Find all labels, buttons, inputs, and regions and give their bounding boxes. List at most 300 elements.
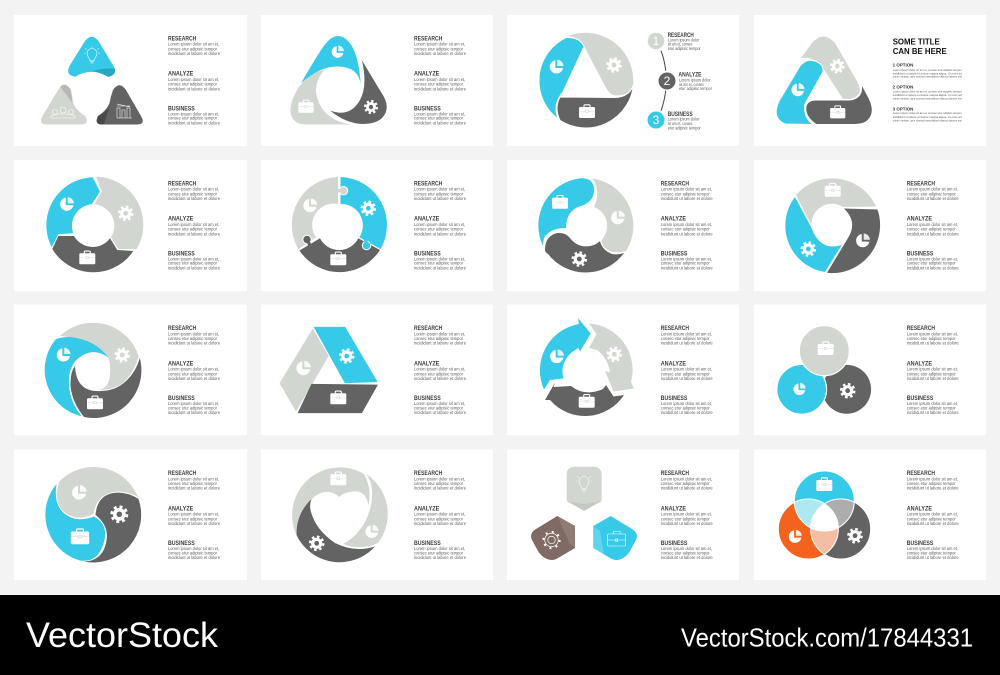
icon: briefcase <box>579 394 595 408</box>
text block: research analyze business: consec etur adipisic tempor <box>168 336 217 341</box>
text block: research analyze business: consec etur adipisic tempor <box>907 261 956 266</box>
panel: pentagon cards <box>507 450 739 580</box>
options text: Lorem ipsum dolor sit am et, consec etur adipisic tempor <box>893 111 962 115</box>
panel: three overlapping circles <box>754 304 986 435</box>
text block: research analyze business: RESEARCH <box>414 35 443 42</box>
text block: research analyze business: consec etur adipisic tempor <box>414 116 463 121</box>
text block: research analyze business: consec etur adipisic tempor <box>661 405 710 410</box>
icon: briefcase <box>830 106 845 118</box>
brand name: VectorStock <box>26 616 219 655</box>
right dark triangle with bar chart <box>97 85 143 124</box>
text block: research analyze business: RESEARCH <box>168 180 197 187</box>
gray segment <box>60 323 138 390</box>
icon: briefcase <box>552 196 568 209</box>
text: business: Lorem ipsum dolor <box>668 117 700 122</box>
text block: research analyze business: consec etur adipisic tempor <box>414 516 463 521</box>
dark segment <box>330 60 387 124</box>
text block: research analyze business: Lorem ipsum dolor sit am et, <box>414 256 465 261</box>
text block: research analyze business: Lorem ipsum dolor sit am et, <box>168 331 219 336</box>
cyan segment <box>539 37 584 119</box>
text: research: etur adipisic tempor <box>668 46 701 51</box>
text block: research analyze business: consec etur adipisic tempor <box>414 371 463 376</box>
text block: research analyze business: consec etur adipisic tempor <box>661 371 710 376</box>
text block: research analyze business: incididunt ut labore et dolore <box>661 341 713 346</box>
icon: gear <box>848 529 862 542</box>
text block: research analyze business: Lorem ipsum dolor sit am et, <box>661 367 712 372</box>
cyan segment <box>340 177 387 249</box>
text block: research analyze business: incididunt ut labore et dolore <box>414 51 466 56</box>
icon: gear <box>310 537 323 550</box>
dark band <box>298 384 377 413</box>
text block: research analyze business: Lorem ipsum dolor sit am et, <box>661 512 712 517</box>
text block: research analyze business: incididunt ut labore et dolore <box>661 410 713 415</box>
text block: research analyze business: consec etur adipisic tempor <box>168 116 217 121</box>
text block: research analyze business: incididunt ut labore et dolore <box>168 410 220 415</box>
icon: pie <box>793 383 806 395</box>
text block: research analyze business: RESEARCH <box>907 325 935 332</box>
text block: research analyze business: ANALYZE <box>661 216 686 223</box>
text block: research analyze business: consec etur adipisic tempor <box>414 46 463 51</box>
text block: research analyze business: consec etur adipisic tempor <box>907 227 956 232</box>
text block: research analyze business: incididunt ut labore et dolore <box>168 521 220 526</box>
dark arrow <box>545 382 624 416</box>
text block: research analyze business: Lorem ipsum dolor sit am et, <box>414 512 465 517</box>
text block: research analyze business: consec etur adipisic tempor <box>168 227 217 232</box>
text block: research analyze business: incididunt ut labore et dolore <box>661 486 713 491</box>
dark segment <box>70 358 141 418</box>
icon: pie <box>296 361 311 375</box>
text block: research analyze business: consec etur adipisic tempor <box>907 481 956 486</box>
text block: research analyze business: consec etur adipisic tempor <box>661 516 710 521</box>
gray segment <box>290 70 350 125</box>
text block: research analyze business: BUSINESS <box>168 105 195 112</box>
text block: research analyze business: Lorem ipsum dolor sit am et, <box>414 111 465 116</box>
text block: research analyze business: consec etur adipisic tempor <box>414 550 463 555</box>
text block: research analyze business: Lorem ipsum dolor sit am et, <box>168 256 219 261</box>
text: research: sit am et, consec <box>668 42 693 47</box>
icon: gear <box>116 348 129 362</box>
text block: research analyze business: incididunt ut labore et dolore <box>414 341 466 346</box>
text block: research analyze business: Lorem ipsum dolor sit am et, <box>414 331 465 336</box>
text block: research analyze business: BUSINESS <box>661 395 687 402</box>
panel: triangle cards <box>14 15 247 146</box>
text block: research analyze business: Lorem ipsum dolor sit am et, <box>661 187 712 192</box>
text block: research analyze business: BUSINESS <box>907 540 933 547</box>
panel: arrow donut <box>14 160 247 291</box>
text block: research analyze business: consec etur adipisic tempor <box>907 371 956 376</box>
venn circles <box>778 471 871 559</box>
icon: briefcase <box>579 105 595 118</box>
icon: pie <box>856 233 870 247</box>
text block: research analyze business <box>661 180 713 270</box>
text block: research analyze business: consec etur adipisic tempor <box>661 227 710 232</box>
gray segment <box>796 178 876 225</box>
icon: gear <box>607 58 621 72</box>
text block: research analyze business: RESEARCH <box>414 470 443 477</box>
left gray triangle with people <box>41 85 87 124</box>
gray segment <box>57 467 138 518</box>
text block: research analyze business: Lorem ipsum dolor sit am et, <box>414 42 465 47</box>
text: analyze: etur adipisic tempor <box>679 86 712 91</box>
text block: research analyze business: consec etur adipisic tempor <box>168 516 217 521</box>
text block: research analyze business: incididunt ut labore et dolore <box>907 410 959 415</box>
gray circle <box>799 326 849 376</box>
text block: research analyze business <box>907 180 959 270</box>
text block: research analyze business: ANALYZE <box>907 505 932 512</box>
text block: research analyze business: RESEARCH <box>661 470 689 477</box>
icon: briefcase <box>816 478 832 491</box>
text block: research analyze business: consec etur adipisic tempor <box>414 191 463 196</box>
icon: gear <box>112 507 127 522</box>
text block: research analyze business: consec etur adipisic tempor <box>661 261 710 266</box>
text block: research analyze business: incididunt ut labore et dolore <box>414 521 466 526</box>
options text: incididunt ut labore et dolore magna aliqua. Ut enim ad <box>893 93 962 97</box>
text block: research analyze business: ANALYZE <box>414 71 439 78</box>
dark segment <box>557 85 634 128</box>
text block: research analyze business: Lorem ipsum dolor sit am et, <box>168 111 219 116</box>
text block: research analyze business: consec etur adipisic tempor <box>168 191 217 196</box>
icon: pie <box>303 198 317 212</box>
panel: circle with triangle hole and numbered steps <box>507 15 739 146</box>
icon: briefcase <box>330 391 346 404</box>
text block: research analyze business: Lorem ipsum dolor sit am et, <box>168 476 219 481</box>
step 2 <box>658 72 676 90</box>
text block: research analyze business: Lorem ipsum dolor sit am et, <box>414 187 465 192</box>
panel: spiral circle <box>14 304 247 435</box>
text block: research analyze business: consec etur adipisic tempor <box>661 481 710 486</box>
text block: research analyze business: incididunt ut labore et dolore <box>907 521 959 526</box>
text block: research analyze business: BUSINESS <box>168 395 195 402</box>
text block: research analyze business: ANALYZE <box>907 360 932 367</box>
gray arrow <box>589 324 634 392</box>
text: business: etur adipisic tempor <box>668 125 701 130</box>
text: research: Lorem ipsum dolor <box>668 37 700 42</box>
gray band <box>280 329 328 411</box>
text: business: BUSINESS <box>668 111 693 118</box>
text block: research analyze business: Lorem ipsum dolor sit am et, <box>168 222 219 227</box>
icon: pie <box>365 525 379 538</box>
text block: research analyze business: RESEARCH <box>661 180 689 187</box>
gray pentagon with bulb <box>567 467 602 511</box>
text block: research analyze business: RESEARCH <box>168 470 197 477</box>
cyan segment <box>785 197 842 272</box>
panel: folded triangle <box>261 304 493 435</box>
text block: research analyze business: Lorem ipsum dolor sit am et, <box>661 331 712 336</box>
panel: yin yang circle <box>14 450 247 580</box>
text block: research analyze business: consec etur adipisic tempor <box>168 405 217 410</box>
text block: research analyze business: ANALYZE <box>168 360 193 367</box>
options text <box>893 63 962 122</box>
upper gray segment <box>292 467 370 534</box>
cyan circle <box>777 364 827 414</box>
panel: rounded triangle with title <box>754 15 986 146</box>
gray segment <box>94 177 143 249</box>
text block: research analyze business <box>168 470 220 560</box>
text block: research analyze business: consec etur adipisic tempor <box>168 261 217 266</box>
dark segment <box>300 238 380 272</box>
puzzle knobs <box>302 186 371 250</box>
text block: research analyze business <box>661 470 713 560</box>
text block: research analyze business: incididunt ut labore et dolore <box>907 486 959 491</box>
text block: research analyze business: RESEARCH <box>907 470 935 477</box>
gray segment <box>592 178 633 252</box>
icon: pie <box>60 197 74 211</box>
footer bar <box>0 595 1000 675</box>
text block: research analyze business: consec etur adipisic tempor <box>907 336 956 341</box>
text block: research analyze business: RESEARCH <box>414 180 443 187</box>
cyan arrow <box>540 318 591 390</box>
text block: research analyze business: Lorem ipsum dolor sit am et, <box>907 512 958 517</box>
text block: research analyze business: consec etur adipisic tempor <box>907 405 956 410</box>
text block: research analyze business: Lorem ipsum dolor sit am et, <box>907 476 958 481</box>
text block: research analyze business: Lorem ipsum dolor sit am et, <box>907 546 958 551</box>
text block: research analyze business: consec etur adipisic tempor <box>661 336 710 341</box>
options text: incididunt ut labore et dolore magna aliqua. Ut enim ad <box>893 115 962 119</box>
text block: research analyze business: consec etur adipisic tempor <box>414 481 463 486</box>
text block: research analyze business: BUSINESS <box>414 105 441 112</box>
cyan segment <box>538 178 594 246</box>
text block: research analyze business: ANALYZE <box>661 360 686 367</box>
text block: research analyze business: BUSINESS <box>907 395 933 402</box>
icon: briefcase <box>330 252 346 265</box>
options text: Lorem ipsum dolor sit am et, consec etur adipisic tempor <box>893 68 962 72</box>
icon: gear <box>573 252 586 266</box>
text block: research analyze business: incididunt ut labore et dolore <box>661 555 713 560</box>
text block: research analyze business: consec etur adipisic tempor <box>168 46 217 51</box>
top cyan triangle with bulb <box>68 37 115 77</box>
icon: gear <box>362 202 375 215</box>
text: business: sit am et, consec <box>668 121 693 126</box>
text block: research analyze business: incididunt ut labore et dolore <box>168 120 220 125</box>
icon: gear <box>831 60 844 72</box>
icon: briefcase <box>330 472 346 485</box>
text block: research analyze business: consec etur adipisic tempor <box>168 371 217 376</box>
title: CAN BE HERE <box>893 47 947 56</box>
text block: research analyze business: consec etur adipisic tempor <box>414 82 463 87</box>
text block: research analyze business: ANALYZE <box>414 360 439 367</box>
text block: research analyze business: consec etur adipisic tempor <box>414 227 463 232</box>
text block: research analyze business <box>168 180 220 270</box>
text block: research analyze business: Lorem ipsum dolor sit am et, <box>907 256 958 261</box>
icon: pie <box>550 60 564 74</box>
text block: research analyze business: RESEARCH <box>414 325 443 332</box>
text block: research analyze business: ANALYZE <box>168 505 193 512</box>
text block: research analyze business: Lorem ipsum dolor sit am et, <box>414 546 465 551</box>
text block: research analyze business: incididunt ut labore et dolore <box>414 231 466 236</box>
text block: research analyze business: incididunt ut labore et dolore <box>907 196 959 201</box>
text block: research analyze business: RESEARCH <box>907 180 935 187</box>
text block: research analyze business: Lorem ipsum dolor sit am et, <box>168 546 219 551</box>
text block: research analyze business: Lorem ipsum dolor sit am et, <box>907 331 958 336</box>
text block: research analyze business <box>168 325 220 415</box>
text block: research analyze business: consec etur adipisic tempor <box>907 550 956 555</box>
icon: gear <box>340 349 353 363</box>
text block: research analyze business: incididunt ut labore et dolore <box>168 486 220 491</box>
text block: research analyze business: BUSINESS <box>168 250 195 257</box>
text block: research analyze business: ANALYZE <box>661 505 686 512</box>
text block: research analyze business: incididunt ut labore et dolore <box>907 265 959 270</box>
text: analyze: Lorem ipsum dolor <box>679 77 711 82</box>
text block: research analyze business: incididunt ut labore et dolore <box>414 196 466 201</box>
icon: pie <box>550 349 564 363</box>
text block: research analyze business <box>414 180 466 270</box>
icon: pie <box>789 530 802 543</box>
text block: research analyze business: Lorem ipsum dolor sit am et, <box>414 222 465 227</box>
title: SOME TITLE <box>893 37 940 46</box>
icon: briefcase <box>825 184 841 197</box>
text block: research analyze business: ANALYZE <box>414 216 439 223</box>
gray segment <box>568 33 633 96</box>
gray segment <box>292 177 338 249</box>
panel: venn diagram <box>754 450 986 580</box>
text: analyze: ANALYZE <box>678 72 702 79</box>
text block: research analyze business: incididunt ut labore et dolore <box>661 376 713 381</box>
cyan segment <box>45 337 108 416</box>
text: business <box>668 111 701 130</box>
options text: 2 OPTION <box>893 85 913 90</box>
text block: research analyze business <box>168 35 220 125</box>
text block: research analyze business: incididunt ut labore et dolore <box>414 376 466 381</box>
panel: circular arrows <box>507 304 739 435</box>
icon: briefcase <box>298 100 314 113</box>
text block: research analyze business: incididunt ut labore et dolore <box>168 265 220 270</box>
text block: research analyze business: Lorem ipsum dolor sit am et, <box>661 256 712 261</box>
text block: research analyze business: incididunt ut labore et dolore <box>907 555 959 560</box>
text block: research analyze business: BUSINESS <box>414 395 441 402</box>
text block: research analyze business: incididunt ut labore et dolore <box>168 555 220 560</box>
icon: gear <box>802 242 815 256</box>
text block: research analyze business: consec etur adipisic tempor <box>907 191 956 196</box>
title <box>893 37 947 56</box>
panel: curved rounded triangle <box>261 15 493 146</box>
text block: research analyze business: consec etur adipisic tempor <box>168 550 217 555</box>
text block: research analyze business: consec etur adipisic tempor <box>661 191 710 196</box>
text block: research analyze business: RESEARCH <box>661 325 689 332</box>
text block: research analyze business: BUSINESS <box>414 540 441 547</box>
dark segment <box>827 208 880 273</box>
icon: briefcase <box>87 396 103 409</box>
text block: research analyze business: consec etur adipisic tempor <box>414 336 463 341</box>
icon: briefcase <box>818 342 834 355</box>
gray band <box>801 36 860 99</box>
text block: research analyze business <box>907 325 959 415</box>
text block: research analyze business: incididunt ut labore et dolore <box>661 196 713 201</box>
text block: research analyze business: BUSINESS <box>661 250 687 257</box>
text block: research analyze business: incididunt ut labore et dolore <box>414 410 466 415</box>
text: analyze: sit am et, consec <box>679 82 704 87</box>
panel: wavy donut <box>507 160 739 291</box>
text block: research analyze business: incididunt ut labore et dolore <box>168 86 220 91</box>
text block: research analyze business <box>414 325 466 415</box>
icon: briefcase <box>79 251 95 264</box>
text block: research analyze business: consec etur adipisic tempor <box>168 481 217 486</box>
text block: research analyze business: BUSINESS <box>907 250 933 257</box>
icon: pie <box>791 83 805 96</box>
panel: heart circle <box>261 450 493 580</box>
text block: research analyze business <box>414 470 466 560</box>
cyan segment <box>45 484 105 561</box>
text block: research analyze business: ANALYZE <box>907 216 932 223</box>
text block: research analyze business: Lorem ipsum dolor sit am et, <box>907 367 958 372</box>
icon: gear <box>365 101 377 113</box>
dark circle <box>822 365 871 414</box>
text block: research analyze business: consec etur adipisic tempor <box>661 550 710 555</box>
dark band <box>806 83 872 124</box>
text block: research analyze business: Lorem ipsum dolor sit am et, <box>907 187 958 192</box>
text block: research analyze business: Lorem ipsum dolor sit am et, <box>661 546 712 551</box>
icon: briefcase <box>71 529 89 544</box>
right gray segment <box>343 474 388 547</box>
text block: research analyze business: incididunt ut labore et dolore <box>661 521 713 526</box>
icon: pie <box>72 485 87 500</box>
text block: research analyze business <box>414 35 466 125</box>
text block: research analyze business: RESEARCH <box>168 35 197 42</box>
text block: research analyze business: Lorem ipsum dolor sit am et, <box>168 401 219 406</box>
text block: research analyze business: incididunt ut labore et dolore <box>414 555 466 560</box>
text block: research analyze business <box>661 325 713 415</box>
text block: research analyze business: consec etur adipisic tempor <box>907 516 956 521</box>
image url: VectorStock.com/17844331 <box>681 622 973 652</box>
icon: gear <box>119 207 132 220</box>
text block: research analyze business: BUSINESS <box>414 250 441 257</box>
options text: minim veniam, quis nostrud exercitation ullamco laboris nisi <box>893 96 962 100</box>
options text: incididunt ut labore et dolore magna aliqua. Ut enim ad <box>893 72 962 76</box>
text block: research analyze business: Lorem ipsum dolor sit am et, <box>168 367 219 372</box>
options text: 1 OPTION <box>893 63 913 68</box>
cyan band <box>776 60 823 124</box>
text block: research analyze business: Lorem ipsum dolor sit am et, <box>907 222 958 227</box>
step 2: 2 <box>664 74 671 88</box>
cyan segment <box>46 177 100 247</box>
cyan segment <box>301 36 361 85</box>
text block: research analyze business: Lorem ipsum dolor sit am et, <box>907 401 958 406</box>
connector arcs <box>661 51 666 111</box>
text block: research analyze business: incididunt ut labore et dolore <box>414 86 466 91</box>
dark segment <box>296 499 375 562</box>
text block: research analyze business: incididunt ut labore et dolore <box>414 120 466 125</box>
options text: 3 OPTION <box>893 107 913 112</box>
brown pentagon with gear <box>531 516 575 560</box>
options text: minim veniam, quis nostrud exercitation ullamco laboris nisi <box>893 75 962 79</box>
text block: research analyze business: Lorem ipsum dolor sit am et, <box>168 512 219 517</box>
text block: research analyze business: incididunt ut labore et dolore <box>661 231 713 236</box>
panel: swoosh donut <box>754 160 986 291</box>
text block: research analyze business: Lorem ipsum dolor sit am et, <box>414 77 465 82</box>
text block: research analyze business: Lorem ipsum dolor sit am et, <box>414 367 465 372</box>
text block: research analyze business: RESEARCH <box>168 325 197 332</box>
text block: research analyze business: Lorem ipsum dolor sit am et, <box>168 77 219 82</box>
text block: research analyze business: Lorem ipsum dolor sit am et, <box>661 476 712 481</box>
text block: research analyze business: ANALYZE <box>168 71 193 78</box>
panel: puzzle donut <box>261 160 493 291</box>
text block: research analyze business: ANALYZE <box>414 505 439 512</box>
options text: Lorem ipsum dolor sit am et, consec etur adipisic tempor <box>893 90 962 94</box>
text block: research analyze business: BUSINESS <box>661 540 687 547</box>
text block: research analyze business: ANALYZE <box>168 216 193 223</box>
text block: research analyze business: incididunt ut labore et dolore <box>907 341 959 346</box>
text block: research analyze business: consec etur adipisic tempor <box>168 82 217 87</box>
icon: gear <box>608 348 621 361</box>
text block: research analyze business: incididunt ut labore et dolore <box>414 486 466 491</box>
dark segment <box>52 236 133 272</box>
text block: research analyze business: Lorem ipsum dolor sit am et, <box>661 401 712 406</box>
icon: pie <box>57 348 71 362</box>
text: analyze <box>678 72 712 91</box>
icon: pie <box>611 210 625 224</box>
text: research: RESEARCH <box>668 32 694 39</box>
text block: research analyze business: incididunt ut labore et dolore <box>414 265 466 270</box>
text block: research analyze business: incididunt ut labore et dolore <box>907 376 959 381</box>
